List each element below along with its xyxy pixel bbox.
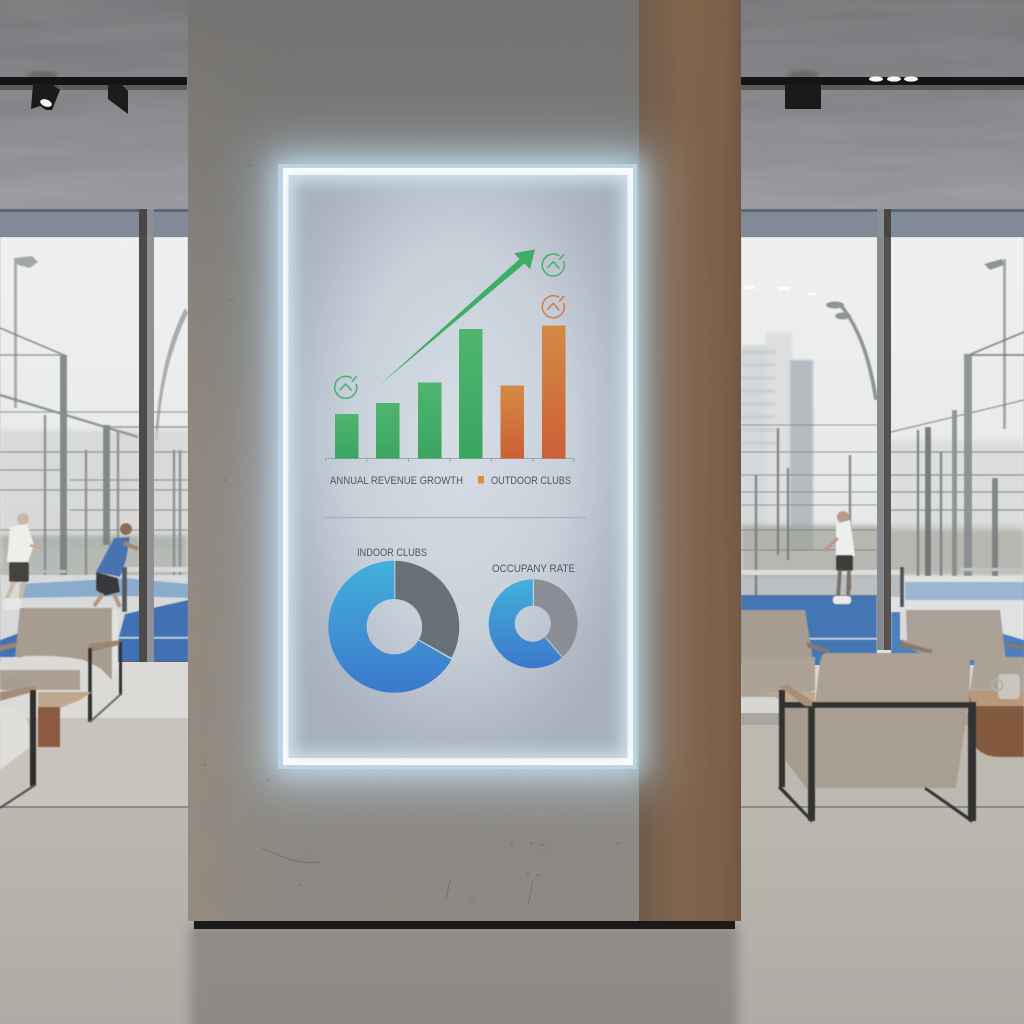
chair side panel <box>785 706 808 790</box>
icon: green badge left <box>335 376 357 398</box>
illuminated display panel <box>278 164 637 769</box>
label: INDOOR CLUBS <box>357 547 427 559</box>
right mullion header <box>877 209 891 237</box>
donut chart: indoor clubs <box>328 547 459 693</box>
bar axis <box>325 458 574 462</box>
lounge chair right-2 <box>900 610 1024 690</box>
track lighting right <box>741 70 1024 109</box>
spotlight 1 <box>31 84 60 110</box>
ceiling reflections <box>745 286 816 295</box>
icon: green badge top <box>542 254 564 276</box>
concrete pits <box>204 47 621 899</box>
haze and far court backdrop <box>0 430 188 585</box>
court fence <box>0 326 188 576</box>
green bars <box>335 329 482 458</box>
gray segment <box>534 579 578 657</box>
tennis net <box>0 567 188 612</box>
player blue <box>94 523 138 607</box>
rug right <box>741 725 1024 806</box>
right window view <box>741 237 1024 667</box>
chair side <box>112 608 118 680</box>
light floor right <box>741 665 1024 713</box>
front lounge chair <box>778 653 976 823</box>
front left chair <box>0 686 36 808</box>
growth arrow <box>379 249 535 386</box>
light block <box>785 84 821 109</box>
mullion <box>877 237 891 650</box>
floor <box>0 660 1024 1024</box>
coffee table right <box>968 690 1024 757</box>
orange bars <box>500 326 566 458</box>
coffee cup <box>992 674 1020 699</box>
track lighting left <box>0 71 187 114</box>
ceiling shadows <box>26 71 58 81</box>
court surface <box>741 576 1024 667</box>
chair back <box>808 653 970 788</box>
rug left <box>0 718 188 806</box>
side table ledge <box>765 692 815 702</box>
legend: outdoor clubs: OUTDOOR CLUBS <box>491 475 571 487</box>
column plinth <box>194 921 735 929</box>
chart caption: annual revenue growth: ANNUAL REVENUE GROWTH <box>330 475 463 487</box>
blue segment <box>489 579 562 668</box>
left mullion header <box>139 209 154 237</box>
window header band <box>0 209 1024 237</box>
chair arm and legs <box>0 640 122 722</box>
panel background <box>288 175 628 758</box>
player left <box>3 513 42 610</box>
icon: orange badge <box>542 296 564 318</box>
panel frame <box>283 168 633 765</box>
coffee table left <box>4 678 92 747</box>
LED lights <box>869 76 918 82</box>
chair back <box>15 608 113 680</box>
far lamp post <box>984 259 1006 429</box>
concrete marks <box>262 848 533 905</box>
panel glow <box>262 148 654 788</box>
column base shadow on floor <box>190 925 738 1024</box>
concrete column <box>188 0 639 921</box>
curved lamp post <box>826 302 878 400</box>
distant building <box>741 332 813 550</box>
wood cladding <box>639 0 741 921</box>
chair frame <box>778 690 976 823</box>
light floor behind lounge left <box>0 662 188 718</box>
chair arm <box>779 685 812 706</box>
sofa: left lounge chair <box>0 608 122 722</box>
blue segment <box>328 561 452 693</box>
sky <box>741 237 1024 667</box>
mullion <box>139 237 154 694</box>
donut chart: occupancy rate <box>489 563 578 668</box>
ceiling <box>0 0 1024 210</box>
chart: annual revenue growth bars <box>325 249 574 462</box>
court surface <box>0 575 188 662</box>
track rail <box>741 77 1024 90</box>
left window view <box>0 237 188 697</box>
player right <box>823 511 855 604</box>
divider <box>325 517 586 518</box>
tennis net <box>741 567 1024 607</box>
sky <box>0 237 188 697</box>
spotlight 2 <box>108 84 128 114</box>
label: OCCUPANY RATE <box>492 563 575 575</box>
panel outer halo edge <box>278 164 637 769</box>
gray segment <box>395 561 459 658</box>
court fence <box>741 332 1024 607</box>
ceiling shadow <box>787 70 819 80</box>
track rail <box>0 77 187 90</box>
far court backdrop <box>741 440 1024 575</box>
chair seat <box>0 657 116 695</box>
lounge chair right-1 <box>741 610 829 697</box>
lounge floor and rugs <box>0 662 1024 808</box>
glazing base <box>118 660 188 662</box>
lamp posts <box>14 256 188 440</box>
